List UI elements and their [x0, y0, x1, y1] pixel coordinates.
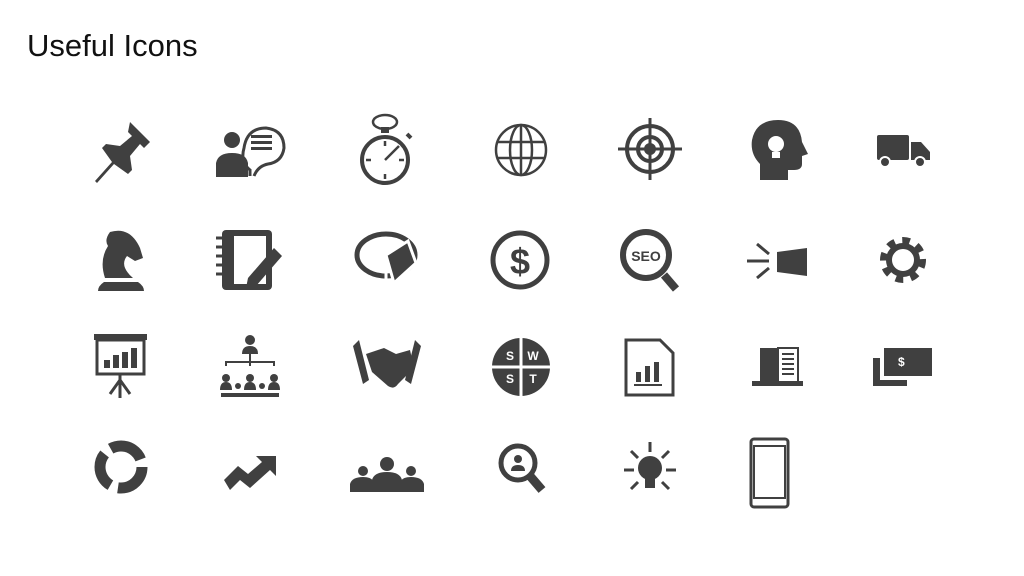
icon: head bulb	[752, 120, 808, 180]
icon: SWOT: S	[506, 349, 514, 363]
icon: cycle	[100, 446, 142, 488]
icon: money	[873, 348, 932, 386]
icon: dollar	[493, 233, 547, 287]
icon: team	[350, 457, 424, 492]
icon: SWOT: W	[527, 349, 539, 363]
icon: phone	[751, 439, 788, 507]
icon: SEO	[623, 232, 676, 289]
icon: handshake	[353, 340, 421, 388]
icon: notebook pen	[216, 230, 282, 290]
icon: money: $	[898, 355, 905, 369]
icon: search person	[501, 446, 542, 490]
icon: trend arrow	[224, 456, 276, 490]
icon: push pin	[95, 122, 150, 183]
icon: SWOT	[490, 336, 552, 398]
icon: document chart	[626, 340, 673, 395]
icon: person speech	[216, 128, 284, 177]
icon: chess knight	[98, 231, 144, 291]
icon: SWOT: T	[529, 372, 537, 386]
icon: truck	[877, 135, 930, 167]
title: Useful Icons	[27, 28, 198, 63]
icon: pie chart	[357, 234, 416, 291]
icon: building	[752, 348, 803, 386]
icon: gear	[885, 242, 921, 278]
icon: globe	[496, 125, 546, 175]
icon: target	[618, 118, 682, 180]
icon: SWOT: S	[506, 372, 514, 386]
icon: lightbulb	[624, 442, 676, 489]
icon: stopwatch	[362, 115, 411, 183]
icon: megaphone light	[747, 244, 807, 278]
icon: org chart	[220, 335, 280, 397]
icon: presentation easel	[94, 334, 147, 398]
icon: dollar: $	[510, 241, 530, 282]
icon: SEO: SEO	[631, 248, 661, 264]
